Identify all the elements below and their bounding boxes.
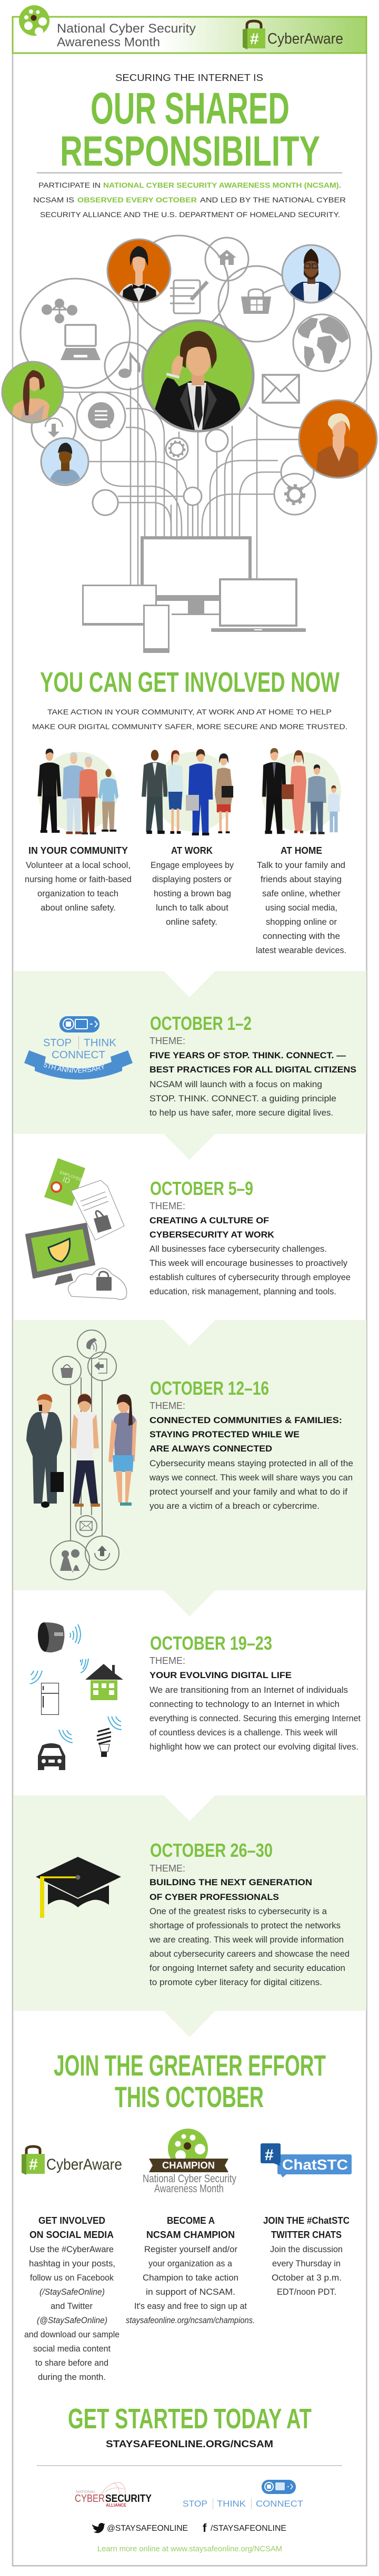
october 19-23 text: connecting to technology to an Internet in which	[149, 1700, 340, 1709]
intro paragraph	[33, 181, 346, 219]
icon: CyberAware lock logo: CyberAware	[267, 30, 343, 47]
people: work group	[142, 749, 234, 835]
column: champion: staysafeonline.org/ncsam/champions.	[126, 2316, 255, 2325]
logo: national cyber security alliance: SECURITY	[105, 2493, 152, 2505]
person: man in suit	[26, 1394, 64, 1508]
intro paragraph: NCSAM IS	[33, 196, 74, 204]
circuit lines	[64, 302, 299, 585]
october 1-2 text: NCSAM will launch with a focus on making	[149, 1080, 322, 1089]
october 5-9 text: THEME:	[149, 1201, 185, 1211]
icon: smart fridge	[30, 1671, 59, 1715]
october 26-30 text: about cybersecurity careers and showcase the need	[149, 1949, 350, 1959]
column: twitter chats: October at 3 p.m.	[272, 2273, 342, 2283]
logo: stop think connect: STOP	[183, 2499, 207, 2509]
column: twitter chats: Join the discussion	[270, 2245, 343, 2254]
icon: CyberAware lock logo: #	[250, 30, 259, 48]
logo: stop think connect anniversary: CONNECT	[52, 1049, 105, 1061]
column: at home: using social media,	[265, 903, 337, 913]
icon: shopping bag	[241, 289, 271, 314]
icon: music note	[118, 354, 139, 378]
logo: NCSAM champion	[143, 2129, 236, 2195]
logo: ChatSTC: ChatSTC	[282, 2156, 348, 2173]
october 26-30 text: BUILDING THE NEXT GENERATION	[149, 1877, 312, 1887]
october 26-30 text: OCTOBER 26–30	[150, 1839, 273, 1861]
header banner	[13, 5, 366, 53]
column: social media: during the month.	[38, 2373, 106, 2382]
column: at work	[151, 845, 234, 927]
october 19-23 text: highlight how we can protect our evolving digital lives.	[149, 1742, 358, 1752]
network circles	[21, 236, 371, 515]
october 19-23 text: of countless devices is a challenge. This week will	[149, 1728, 337, 1737]
logo: national cyber security alliance: CYBER	[75, 2493, 105, 2505]
logo: CyberAware: #	[29, 2156, 38, 2173]
column: twitter chats: JOIN THE #ChatSTC	[263, 2215, 350, 2226]
avatar: left woman	[2, 362, 63, 423]
panel: october 26-30	[13, 1795, 366, 2037]
october 26-30 text: THEME:	[149, 1863, 185, 1874]
october 12-16 text: ways we connect. This week will share ways you can	[149, 1473, 353, 1483]
icon: twitter bird	[92, 2523, 105, 2533]
social handles: @STAYSAFEONLINE	[107, 2524, 188, 2533]
column: in your community: Volunteer at a local school,	[26, 861, 131, 870]
social handles	[92, 2521, 286, 2534]
header title: National Cyber Security	[57, 22, 196, 36]
icon: employee id, document, monitor and cloud: ID	[62, 1175, 72, 1185]
october 1-2 text	[149, 1013, 356, 1118]
october 12-16 text: Cybersecurity means staying protected in all of the	[149, 1459, 353, 1468]
person: woman with headphones	[71, 1393, 100, 1507]
icon: large gear	[286, 486, 304, 504]
social handles: /STAYSAFEONLINE	[211, 2524, 286, 2533]
logo: stop think connect: CONNECT	[256, 2499, 303, 2509]
icon: employee id, document, monitor and cloud	[26, 1158, 127, 1300]
icon: network nodes	[42, 299, 77, 323]
logo: stop think connect anniversary: 5TH ANNIVERSARY	[44, 1062, 104, 1073]
column: twitter chats: TWITTER CHATS	[271, 2230, 342, 2240]
october 5-9 text: OCTOBER 5–9	[150, 1178, 253, 1199]
october 5-9 text	[149, 1178, 351, 1296]
logo: CyberAware	[22, 2146, 122, 2175]
avatar: right woman	[299, 400, 377, 478]
october 1-2 text: STOP. THINK. CONNECT. a guiding principle	[149, 1094, 336, 1103]
column: social media	[24, 2215, 119, 2382]
october 19-23 text: We are transitioning from an Internet of individuals	[149, 1685, 348, 1695]
title block: SECURING THE INTERNET IS	[115, 73, 263, 83]
column: social media: social media content	[33, 2344, 111, 2354]
october 1-2 text: BEST PRACTICES FOR ALL DIGITAL CITIZENS	[149, 1065, 356, 1075]
october 5-9 text: CREATING A CULTURE OF	[149, 1215, 269, 1225]
column: champion: Register yourself and/or	[144, 2245, 238, 2254]
logo: stop think connect anniversary	[24, 1016, 133, 1080]
october 26-30 text: to promote cyber literacy for digital citizens.	[149, 1978, 322, 1987]
icon: laptop large	[211, 579, 306, 632]
column: social media: (/StaySafeOnline)	[39, 2287, 105, 2297]
logo: national cyber security alliance	[75, 2482, 152, 2508]
october 1-2 text: OCTOBER 1–2	[150, 1013, 252, 1034]
icon: chat bubble	[88, 402, 114, 428]
logo: ChatSTC	[261, 2143, 352, 2178]
icon: desktop monitor	[142, 538, 250, 615]
heading: join the greater effort: THIS OCTOBER	[115, 2080, 264, 2113]
icon: notepad	[170, 280, 207, 313]
icon: house	[217, 250, 236, 265]
column: at work: lunch to talk about	[156, 903, 228, 913]
column: at home	[256, 845, 346, 955]
header title: Awareness Month	[57, 35, 160, 49]
october 26-30 text: we are creating. This week will provide information	[149, 1935, 344, 1945]
october 12-16 text: CONNECTED COMMUNITIES & FAMILIES:	[149, 1415, 342, 1425]
column: in your community: about online safety.	[41, 903, 116, 913]
logo: stop think connect anniversary: THINK	[84, 1037, 117, 1049]
column: in your community: nursing home or faith-based	[25, 875, 132, 884]
column: at home: friends about staying	[261, 875, 342, 884]
october 26-30 text: for ongoing Internet safety and security education	[149, 1964, 345, 1973]
october 5-9 text: All businesses face cybersecurity challenges.	[149, 1244, 327, 1254]
column: social media: GET INVOLVED	[38, 2215, 105, 2226]
logo: national cyber security alliance: ALLIANCE	[106, 2503, 127, 2508]
intro paragraph: SECURITY ALLIANCE AND THE U.S. DEPARTMENT OF HOMELAND SECURITY.	[40, 210, 340, 219]
column: twitter chats: every Thursday in	[272, 2259, 341, 2268]
logo: CyberAware: CyberAware	[46, 2156, 122, 2173]
logo: NCSAM champion: CHAMPION	[162, 2160, 215, 2171]
logo: stop think connect anniversary: STOP	[43, 1037, 72, 1049]
icon: connected devices	[30, 1622, 123, 1770]
october 12-16 text: STAYING PROTECTED WHILE WE	[149, 1429, 300, 1439]
icon: NCSAM globe logo	[19, 5, 49, 36]
icon: phone	[143, 606, 169, 653]
column: at work: online safety.	[166, 917, 217, 927]
avatar: top man	[107, 239, 171, 302]
logo: national cyber security alliance: NATIONAL	[76, 2490, 96, 2494]
panel: october 5-9	[26, 1158, 351, 1300]
column: champion: in support of NCSAM.	[146, 2287, 235, 2297]
column: champion: NCSAM CHAMPION	[146, 2230, 235, 2240]
column: social media: to share before and	[35, 2358, 108, 2368]
column: social media: (@StaySafeOnline)	[37, 2316, 107, 2325]
column: in your community	[25, 845, 132, 913]
avatar: upper right man	[282, 245, 340, 304]
column: social media: hashtag in your posts,	[29, 2259, 115, 2268]
people: home group	[261, 748, 341, 834]
icon: CyberAware lock logo	[243, 21, 343, 49]
column: twitter chats	[263, 2215, 350, 2297]
column: champion: BECOME A	[167, 2215, 215, 2226]
column: at work: displaying posters or	[152, 875, 232, 884]
logo: stop think connect	[183, 2480, 303, 2509]
column: champion: It's easy and free to sign up at	[134, 2302, 247, 2311]
icon: fitness band	[37, 1622, 81, 1652]
october 19-23 text: YOUR EVOLVING DIGITAL LIFE	[149, 1670, 292, 1680]
column: at home: connecting with the	[263, 932, 340, 941]
column: in your community: IN YOUR COMMUNITY	[28, 845, 128, 856]
icon: tablet	[82, 586, 157, 626]
october 19-23 text	[149, 1632, 361, 1752]
icon: laptop	[61, 325, 101, 360]
column: at home: latest wearable devices.	[256, 946, 346, 955]
icon: employee id, document, monitor and cloud: EMPLOYEE	[59, 1170, 83, 1182]
column: social media: and download our sample	[24, 2330, 119, 2339]
heading: join the greater effort	[54, 2049, 326, 2113]
october 12-16 text: OCTOBER 12–16	[150, 1377, 269, 1399]
october 1-2 text: THEME:	[149, 1036, 185, 1046]
avatar: lower left person	[41, 438, 88, 486]
icon: download	[45, 418, 63, 437]
icon: graduation cap	[36, 1857, 121, 1918]
october 1-2 text: FIVE YEARS OF STOP. THINK. CONNECT. —	[149, 1050, 346, 1060]
october 5-9 text: CYBERSECURITY AT WORK	[149, 1230, 275, 1240]
call to action	[68, 2403, 312, 2449]
october 12-16 text: protect yourself and your family and what to do if	[149, 1487, 347, 1497]
column: social media: ON SOCIAL MEDIA	[29, 2230, 114, 2240]
october 26-30 text: One of the greatest risks to cybersecurity is a	[149, 1907, 327, 1916]
header title	[57, 22, 196, 49]
icon: smart car	[38, 1730, 73, 1770]
october 19-23 text: THEME:	[149, 1655, 185, 1666]
october 19-23 text: everything is connected. Securing this emerging Internet	[149, 1714, 361, 1723]
people: community group	[38, 749, 118, 834]
october 19-23 text: OCTOBER 19–23	[150, 1632, 272, 1654]
logo: NCSAM champion: Awareness Month	[154, 2183, 224, 2195]
column: at home: AT HOME	[281, 845, 322, 856]
panel: october 19-23	[30, 1622, 361, 1770]
icon: connected people with circles	[26, 1330, 137, 1580]
october 12-16 text: ARE ALWAYS CONNECTED	[149, 1444, 272, 1454]
column: at home: safe online, whether	[262, 889, 341, 898]
avatar: centre man	[143, 321, 253, 436]
intro paragraph: OBSERVED EVERY OCTOBER	[77, 196, 197, 204]
october 26-30 text: shortage of professionals to protect the networks	[149, 1921, 341, 1930]
october 5-9 text: establish cultures of cybersecurity through employee	[149, 1273, 351, 1282]
network illustration	[2, 236, 377, 653]
panel: october 12-16	[13, 1320, 366, 1617]
october 5-9 text: education, risk management, planning and tools.	[149, 1287, 336, 1296]
column: champion: Champion to take action	[143, 2273, 238, 2283]
column: champion	[126, 2215, 255, 2325]
column: in your community: organization to teach	[37, 889, 118, 898]
column: social media: Use the #CyberAware	[29, 2245, 114, 2254]
social handles: f	[203, 2521, 207, 2534]
icon: smart house	[81, 1659, 123, 1700]
intro paragraph: NATIONAL CYBER SECURITY AWARENESS MONTH (NCSAM).	[103, 181, 341, 189]
intro paragraph: AND LED BY THE NATIONAL CYBER	[200, 196, 346, 204]
get involved intro	[32, 708, 347, 731]
october 12-16 text	[149, 1377, 353, 1511]
panel: october 1-2	[13, 971, 366, 1160]
icon: smart bulb	[97, 1716, 122, 1757]
title block: OUR SHARED	[91, 84, 290, 133]
footer link: Learn more online at www.staysafeonline.org/NCSAM	[97, 2544, 282, 2553]
october 5-9 text: This week will encourage businesses to proactively	[149, 1259, 348, 1268]
icon: envelope	[263, 375, 299, 403]
column: champion: your organization as a	[148, 2259, 233, 2268]
call to action: STAYSAFEONLINE.ORG/NCSAM	[106, 2439, 273, 2449]
october 1-2 text: to help us have safer, more secure digital lives.	[149, 1108, 333, 1118]
column: twitter chats: EDT/noon PDT.	[277, 2287, 336, 2297]
intro paragraph: PARTICIPATE IN	[38, 181, 101, 189]
october 26-30 text	[149, 1839, 350, 1987]
column: at work: hosting a brown bag	[154, 889, 231, 898]
get involved intro: TAKE ACTION IN YOUR COMMUNITY, AT WORK AND AT HOME TO HELP	[47, 708, 332, 716]
icon: small gear	[169, 442, 184, 456]
get involved intro: MAKE OUR DIGITAL COMMUNITY SAFER, MORE SECURE AND MORE TRUSTED.	[32, 722, 347, 731]
october 12-16 text: you are a victim of a breach or cybercrime.	[149, 1501, 320, 1511]
logo: ChatSTC: #	[265, 2146, 274, 2164]
icon: devices	[82, 538, 306, 653]
column: social media: and Twitter	[51, 2302, 93, 2311]
column: at home: Talk to your family and	[257, 861, 345, 870]
column: at work: AT WORK	[171, 845, 213, 856]
october 12-16 text: THEME:	[149, 1401, 185, 1411]
person: woman in vest	[108, 1394, 137, 1506]
icon: globe	[298, 316, 348, 367]
title block	[60, 73, 320, 175]
column: social media: follow us on Facebook	[30, 2273, 114, 2283]
logo: NCSAM champion: National Cyber Security	[143, 2173, 236, 2185]
column: at home: shopping online or	[266, 917, 337, 927]
october 26-30 text: OF CYBER PROFESSIONALS	[149, 1892, 279, 1902]
column: at work: Engage employees by	[151, 861, 234, 870]
logo: stop think connect: THINK	[217, 2499, 246, 2509]
